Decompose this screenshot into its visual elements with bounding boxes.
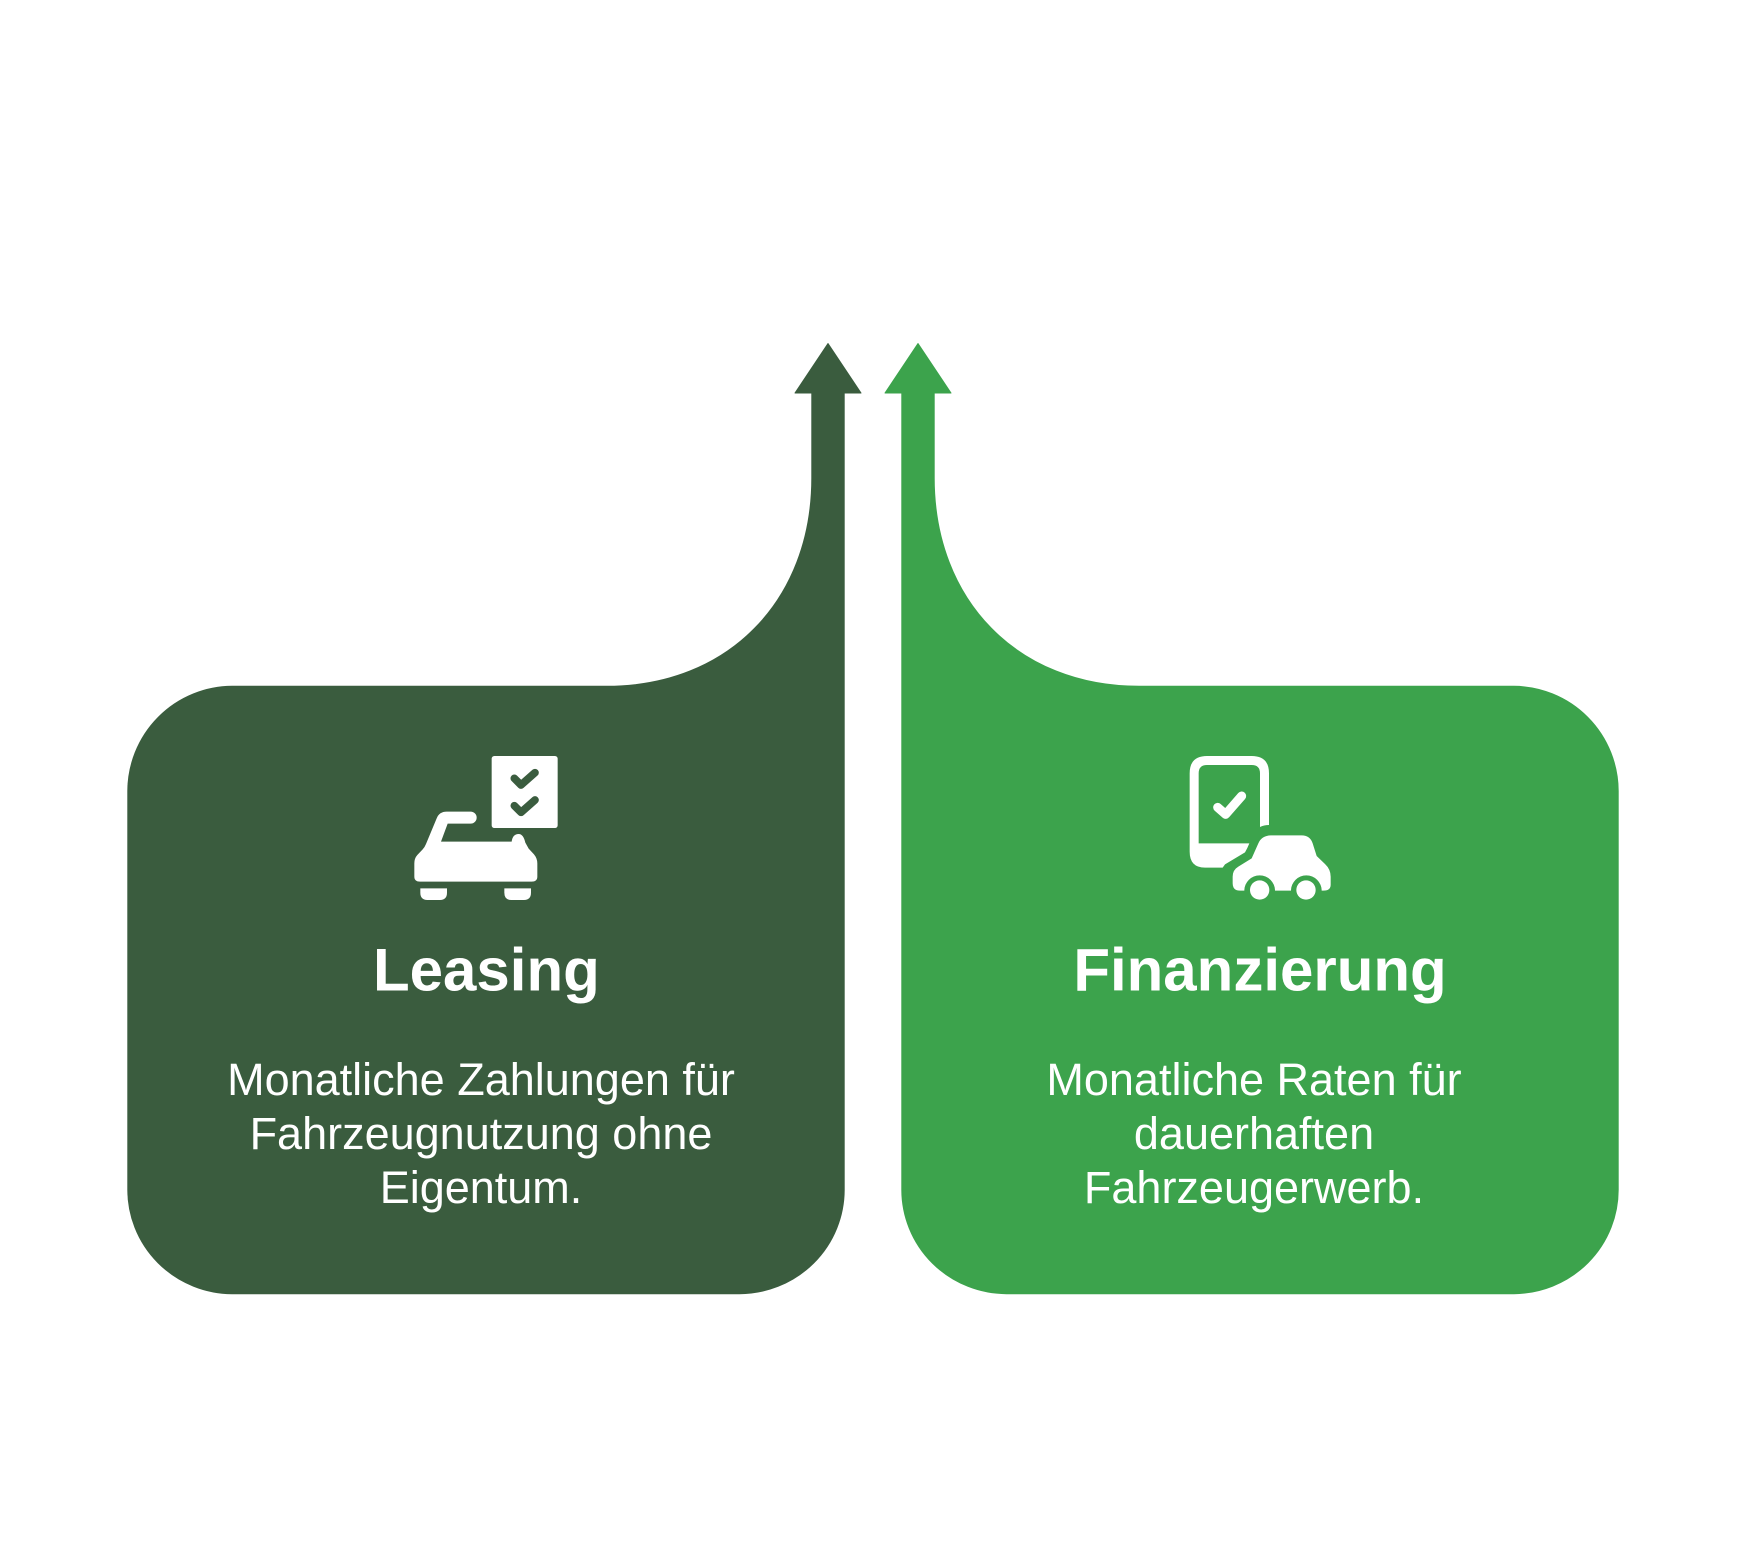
heading: Leasing: Leasing <box>373 936 600 1004</box>
text: Leasing description <box>227 1054 735 1213</box>
text: Finanzierung description: dauerhaften <box>1134 1108 1374 1159</box>
text: Leasing description: Eigentum. <box>380 1162 582 1213</box>
icon: phone with check and car <box>1190 756 1331 900</box>
text: Finanzierung description: Fahrzeugerwerb. <box>1084 1162 1424 1213</box>
icon: car with checklist <box>414 756 558 900</box>
text: Finanzierung description: Monatliche Raten für <box>1046 1054 1462 1105</box>
panel: Finanzierung <box>885 344 1618 1294</box>
arrow panel shape: dark green <box>128 344 861 1294</box>
text: Leasing description: Monatliche Zahlungen für <box>227 1054 735 1105</box>
text: Leasing description: Fahrzeugnutzung ohne <box>250 1108 712 1159</box>
panel: Leasing <box>128 344 861 1294</box>
arrow panel shape: light green <box>885 344 1618 1294</box>
text: Finanzierung description <box>1046 1054 1462 1213</box>
heading: Finanzierung: Finanzierung <box>1073 936 1447 1004</box>
